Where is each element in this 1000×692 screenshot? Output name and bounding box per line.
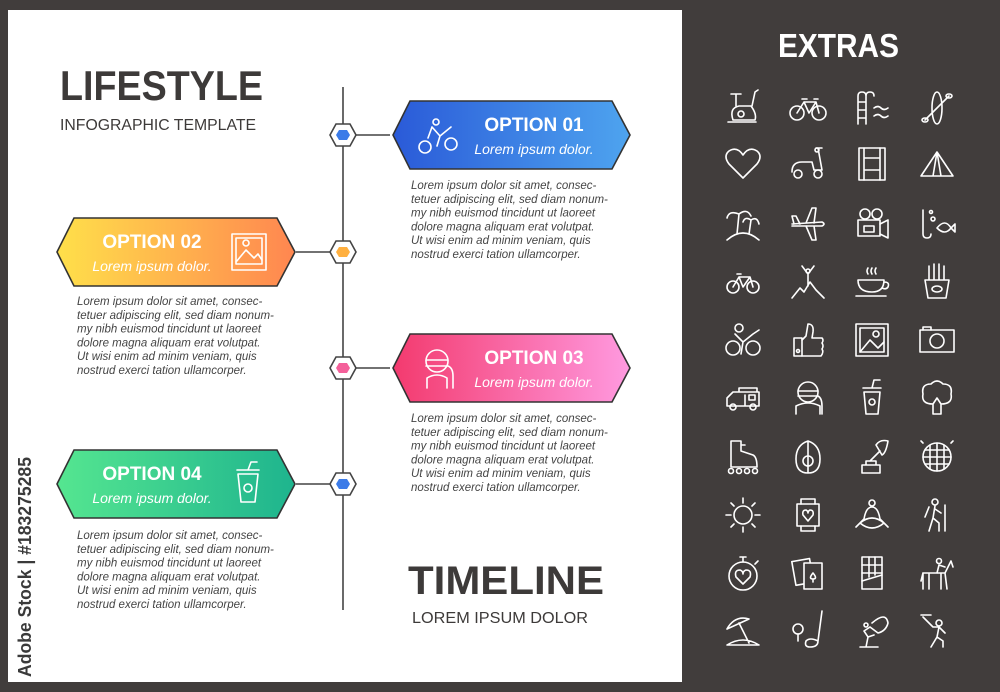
row 7 (728, 441, 758, 474)
heading: extras: EXTRAS (778, 27, 899, 64)
watermark vertical text: Adobe Stock | #183275285 (15, 457, 35, 677)
banner: option 03: Lorem ipsum dolor. (474, 374, 594, 390)
timeline line (342, 87, 344, 610)
text block: option 03: nostrud exerci tation ullamcorper. (411, 482, 581, 494)
banner: option 03 (393, 334, 630, 402)
banner: option 03: OPTION 03 (484, 348, 584, 369)
text block: option 01: Lorem ipsum dolor sit amet, consec- (411, 180, 597, 192)
text block: option 03: tetuer adipiscing elit, sed diam nonum- (411, 427, 608, 439)
row 5 (726, 324, 760, 355)
subtitle: INFOGRAPHIC TEMPLATE (60, 117, 256, 134)
text block: option 02: Ut wisi enim ad minim veniam, quis (77, 351, 257, 363)
banner: option 04: Lorem ipsum dolor. (92, 490, 212, 506)
banner: option 02: Lorem ipsum dolor. (92, 258, 212, 274)
text block: option 04: Ut wisi enim ad minim veniam, quis (77, 585, 257, 597)
text block: option 04: my nibh euismod tincidunt ut laoreet (77, 558, 262, 570)
text block: option 01: dolore magna aliquam erat volutpat. (411, 221, 594, 233)
row 9 (729, 557, 758, 590)
title: LIFESTYLE (60, 62, 263, 109)
row 10 (727, 618, 759, 645)
icon grid (726, 90, 955, 647)
icon: picture (232, 234, 266, 270)
text block: option 02: Lorem ipsum dolor sit amet, consec- (77, 296, 263, 308)
row 6 (727, 388, 759, 410)
banner: option 01: OPTION 01 (484, 115, 584, 136)
text block: option 01: nostrud exerci tation ullamcorper. (411, 249, 581, 261)
icon: cyclist (419, 119, 457, 153)
banner: option 01: Lorem ipsum dolor. (474, 141, 594, 157)
heading: timeline: TIMELINE (408, 559, 604, 603)
banner: option 02: OPTION 02 (102, 232, 202, 253)
icon: cup (237, 462, 259, 502)
text block: option 04: Lorem ipsum dolor sit amet, consec- (77, 530, 263, 542)
row 4 (727, 274, 759, 293)
text block: option 01: Ut wisi enim ad minim veniam, quis (411, 235, 591, 247)
text block: option 02: dolore magna aliquam erat volutpat. (77, 337, 260, 349)
row 1 (728, 90, 758, 122)
banner: option 04 (57, 450, 295, 518)
text block: option 02: nostrud exerci tation ullamcorper. (77, 365, 247, 377)
text block: option 04: dolore magna aliquam erat volutpat. (77, 571, 260, 583)
text block: option 01: tetuer adipiscing elit, sed diam nonum- (411, 194, 608, 206)
banner: option 01 (393, 101, 630, 169)
text block: option 04: nostrud exerci tation ullamcorper. (77, 599, 247, 611)
text block: option 03: Lorem ipsum dolor sit amet, consec- (411, 413, 597, 425)
text block: option 02: tetuer adipiscing elit, sed diam nonum- (77, 310, 274, 322)
row 3 (727, 211, 759, 240)
text block: option 04: tetuer adipiscing elit, sed diam nonum- (77, 544, 274, 556)
text block: option 02: my nibh euismod tincidunt ut laoreet (77, 324, 262, 336)
text block: option 03: Ut wisi enim ad minim veniam, quis (411, 468, 591, 480)
timeline nodes (330, 124, 356, 495)
panel: main white (8, 10, 682, 682)
icon: person vr (426, 350, 453, 388)
text block: option 03: dolore magna aliquam erat volutpat. (411, 454, 594, 466)
row 2 (726, 149, 760, 178)
banner: option 04: OPTION 04 (102, 464, 202, 485)
banner: option 02 (57, 218, 295, 286)
subheading: LOREM IPSUM DOLOR (412, 610, 588, 627)
text block: option 01: my nibh euismod tincidunt ut laoreet (411, 208, 596, 220)
text block: option 03: my nibh euismod tincidunt ut laoreet (411, 441, 596, 453)
connectors (296, 135, 390, 484)
row 8 (726, 498, 760, 532)
